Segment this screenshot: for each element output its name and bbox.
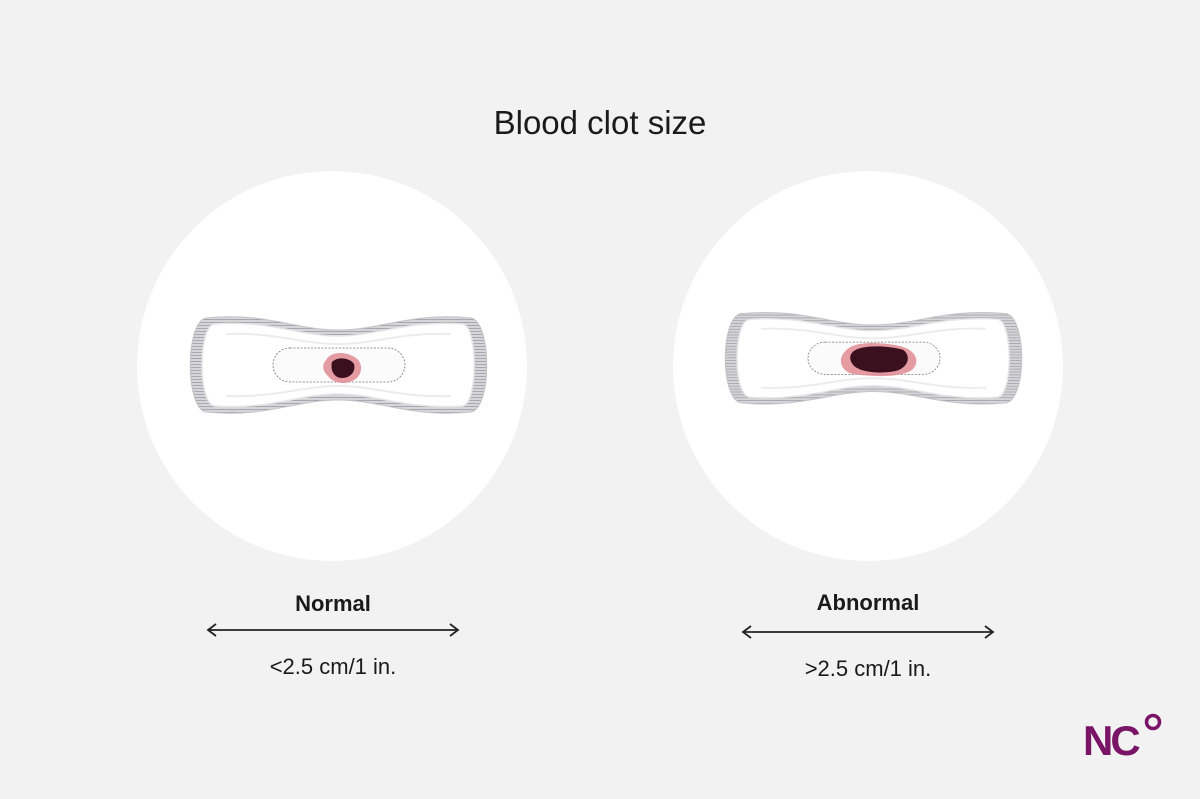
title: Blood clot size [494, 104, 706, 141]
text: abnormal measurement: >2.5 cm/1 in. [805, 656, 931, 681]
pad: normal clot [190, 317, 487, 413]
arrow: abnormal size [743, 626, 993, 638]
circle: normal background [137, 171, 527, 561]
panel: normal [137, 171, 527, 679]
pad: abnormal clot [725, 312, 1022, 404]
arrow: normal size [208, 624, 458, 636]
label: Normal: Normal [295, 591, 371, 616]
circle: abnormal background [673, 171, 1063, 561]
label: Abnormal: Abnormal [817, 590, 919, 615]
panel: abnormal [673, 171, 1063, 681]
logo: NC: NC [1083, 717, 1140, 764]
text: normal measurement: <2.5 cm/1 in. [270, 654, 396, 679]
logo: NC [1083, 716, 1160, 764]
clot: large [841, 343, 916, 376]
clot: small [323, 353, 361, 383]
